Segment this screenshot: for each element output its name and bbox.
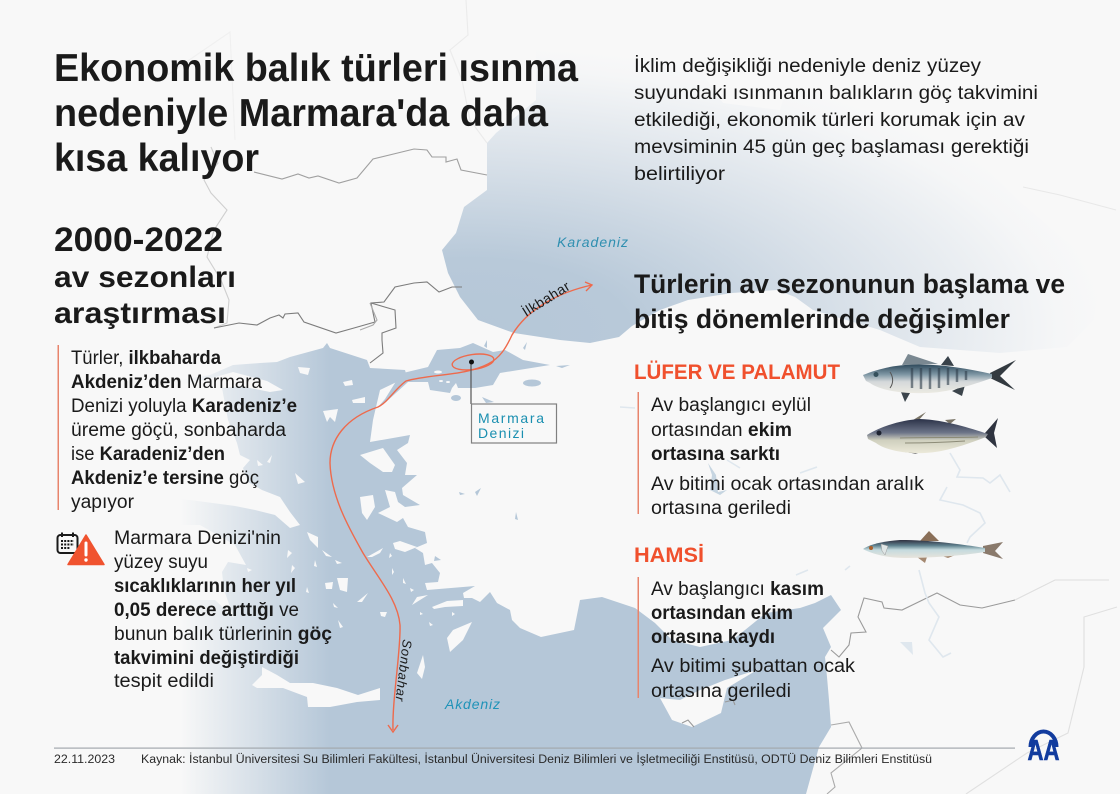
intro text: suyundaki ısınmanın balıkların göç takvimini <box>634 83 1038 104</box>
panel: migration text: ise Karadeniz’den <box>71 444 225 465</box>
panel: migration text: yapıyor <box>71 492 135 513</box>
map: Peloponnese <box>140 525 246 618</box>
map: Rhodes <box>447 622 472 652</box>
panel: Hamsi text: ortasına geriledi <box>651 681 791 702</box>
icon: calendar warning <box>58 532 104 564</box>
panel: migration text: Akdeniz’e tersine göç <box>71 468 259 489</box>
intro text: mevsiminin 45 gün geç başlaması gerektiği <box>634 137 1029 158</box>
title: kısa kalıyor <box>54 137 259 180</box>
panel: temperature text: bunun balık türlerinin göç <box>114 624 332 645</box>
panel: Lüfer ve Palamut text: Av başlangıcı eylül <box>651 395 811 416</box>
map: Marmara callout: Marmara <box>478 410 544 426</box>
panel: Hamsi text <box>638 577 856 702</box>
icon: AA logo: AA <box>1028 735 1060 767</box>
heading: season changes: bitiş dönemlerinde değişimler <box>634 304 1010 334</box>
title: nedeniyle Marmara'da daha <box>54 92 548 135</box>
map: inland lakes <box>434 340 913 655</box>
map: Marmara callout: Denizi <box>478 425 524 441</box>
map: Sonbahar route label: Sonbahar <box>392 639 415 703</box>
panel: migration text: üreme göçü, sonbaharda <box>71 420 286 441</box>
map: Karadeniz label: Karadeniz <box>557 234 628 250</box>
heading: season changes: Türlerin av sezonunun başlama ve <box>634 269 1065 299</box>
map: Marmara islands <box>434 370 450 383</box>
map: Aegean land and islands <box>140 367 472 707</box>
map: smaller islands <box>247 367 463 679</box>
map: Cyprus <box>660 670 757 727</box>
panel: migration text: Türler, ilkbaharda <box>71 348 221 369</box>
intro text <box>634 56 1038 185</box>
heading: Hamsi: HAMSİ <box>634 544 704 567</box>
map: rivers and reservoirs <box>620 407 1010 657</box>
panel: temperature text <box>114 528 332 692</box>
panel: Lüfer ve Palamut text: ortasına geriledi <box>651 498 791 519</box>
title: Ekonomik balık türleri ısınma <box>54 47 578 90</box>
map: Akdeniz label: Akdeniz <box>444 696 500 712</box>
map: Chios <box>360 495 375 520</box>
panel: Hamsi text: Av başlangıcı kasım <box>651 579 824 600</box>
panel: temperature text: takvimini değiştirdiği <box>114 648 299 669</box>
map: Sea of Marmara <box>378 343 550 407</box>
map: migration route <box>330 282 592 732</box>
panel: Lüfer ve Palamut text: ortasına sarktı <box>651 444 780 465</box>
panel: Hamsi text: ortasına kaydı <box>651 627 775 648</box>
heading: Lüfer ve Palamut: LÜFER VE PALAMUT <box>634 361 840 384</box>
panel: Hamsi text: ortasından ekim <box>651 603 793 624</box>
heading: season changes <box>634 269 1065 334</box>
panel: Lüfer ve Palamut text: Av bitimi ocak ortasından aralık <box>651 474 925 495</box>
panel: Hamsi text: Av bitimi şubattan ocak <box>651 656 856 677</box>
panel: Lüfer ve Palamut text: ortasından ekim <box>651 420 792 441</box>
title <box>54 47 578 180</box>
map: Chalkidiki <box>140 372 300 528</box>
heading: research <box>54 221 236 330</box>
map: Black Sea <box>442 0 1098 353</box>
footer: Kaynak: İstanbul Üniversitesi Su Bilimleri Fakültesi, İstanbul Üniversitesi Deniz Bilimleri ve İşletmeciliği Enstitüsü, ODTÜ Deniz Bilimleri Enstitüsü <box>141 753 932 766</box>
intro text: İklim değişikliği nedeniyle deniz yüzey <box>634 56 982 77</box>
panel: temperature text: Marmara Denizi'nin <box>114 528 281 549</box>
icon: bluefish <box>863 354 1016 402</box>
heading: research: av sezonları <box>54 261 236 294</box>
footer: 22.11.2023 <box>54 754 115 766</box>
map: Lesbos <box>360 448 395 472</box>
map: Marmara callout <box>469 360 556 443</box>
icon: bonito <box>867 412 998 454</box>
map: left fade <box>140 340 330 794</box>
panel: temperature text: sıcaklıklarının her yıl <box>114 576 296 597</box>
map: Aegean and Mediterranean <box>150 343 841 794</box>
icon: anchovy <box>863 531 1003 563</box>
map: Ilkbahar route label: İlkbahar <box>519 277 573 320</box>
panel: migration text <box>58 345 297 513</box>
heading: research: araştırması <box>54 297 226 330</box>
panel: temperature text: yüzey suyu <box>114 552 208 573</box>
panel: Lüfer ve Palamut text <box>638 392 925 519</box>
panel: migration text: Akdeniz’den Marmara <box>71 372 262 393</box>
panel: migration text: Denizi yoluyla Karadeniz’e <box>71 396 297 417</box>
heading: research: 2000-2022 <box>54 221 223 259</box>
map: Crete <box>252 667 380 707</box>
footer <box>54 748 1015 766</box>
panel: temperature text: tespit edildi <box>114 671 214 692</box>
intro text: belirtiliyor <box>634 164 726 185</box>
intro text: etkilediği, ekonomik türleri korumak için av <box>634 110 1026 131</box>
panel: temperature text: 0,05 derece arttığı ve <box>114 600 299 621</box>
